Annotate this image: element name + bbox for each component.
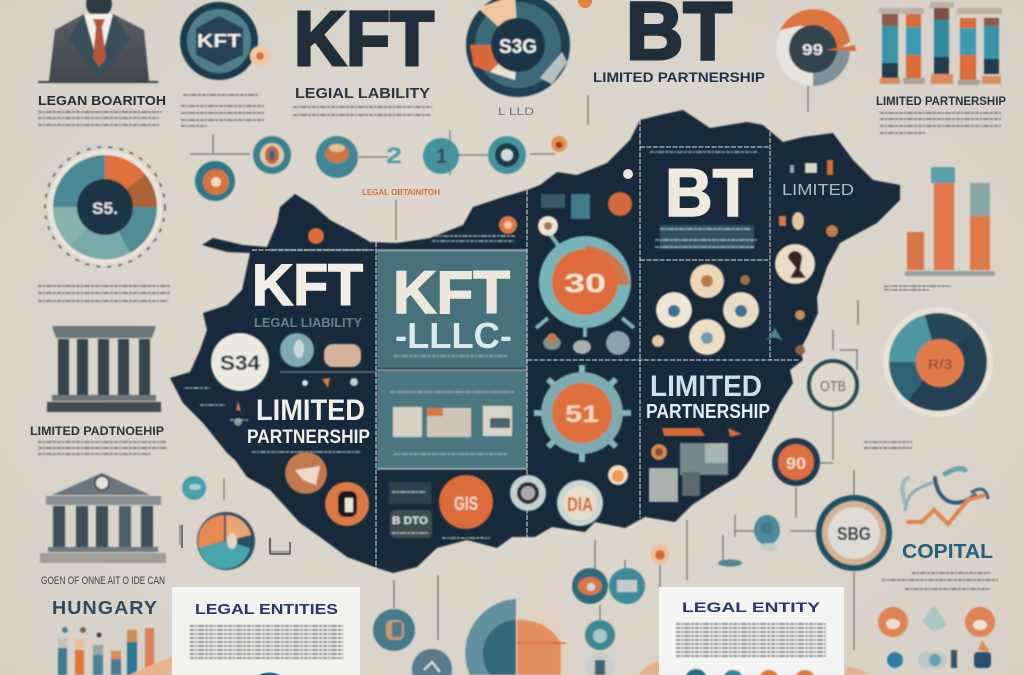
chart: lower left pie [197,512,255,570]
map fine lines [185,236,515,538]
document: legal entity right [659,587,844,675]
label: limited partnership right: LIMITED PARTNERSHIP [876,94,1006,108]
label: legal liability on map: LEGAL LIABILITY [254,315,362,330]
icons: four pale circles [656,264,759,355]
gauge: 51: 51 [565,401,599,428]
icon: KFT badge [180,2,270,80]
heading: partnership in panel: PARTNERSHIP [646,401,770,423]
icon: dark courthouse columns [47,326,161,412]
icons: orange circles lower left map [285,452,369,526]
label: legal liability: LEGIAL LABILITY [295,85,430,102]
badge: SBG ring [816,495,892,571]
hand left [128,657,172,675]
gauge: 30 [536,234,634,337]
text block: columns description [38,442,166,454]
badge: DIA [557,480,603,526]
icons below gauge 30 [543,331,630,355]
icons around pale circles [652,275,805,355]
badge: DIA: DIA [567,495,593,516]
chart: top ring gauge [466,0,570,97]
text: fine map label right [780,204,860,206]
text: teal panel fine lines [390,356,514,454]
ring icon [510,475,546,511]
icons: lower photos [649,428,742,502]
document lines left [190,626,343,658]
connector lines [180,85,858,650]
gauge: 51 [534,365,631,462]
chart: right pie: R/3 [928,356,952,372]
icon: small orange dot [578,0,592,8]
text block: dark mini panel: B DTO [392,515,428,527]
text block: KFT badge description [181,95,264,126]
label: building caption: GOEN OF ONNE AIT O IDE CAN [41,575,165,587]
badge: 90 [772,438,820,486]
circles: bottom centre icons [373,609,452,675]
chart: right bars [905,167,995,276]
document bottom dots right [685,669,815,675]
chart: right pie [883,307,993,417]
document title right: LEGAL ENTITY [682,599,821,615]
text block: donut description [38,286,170,301]
icons above gauge 30 [538,192,632,236]
icons above limited [790,160,833,175]
heading: partnership on map: PARTNERSHIP [247,427,370,448]
icons: bottom right circles [878,605,995,668]
icon: small blue dots [718,560,742,566]
chart: left donut [45,147,165,267]
panel: KFT LLC teal [377,250,527,469]
gauge: 30: 30 [564,268,606,298]
chart: Hungary bars [58,627,154,675]
icon: KFT badge: KFT [197,31,241,51]
text block: legal position description [38,112,162,125]
icon: greek bank building [40,473,166,563]
chart: gauge 99: 99 [802,42,823,59]
icon: pale orange dot [608,465,628,485]
label: Hungary: HUNGARY [52,598,158,618]
badge: 90: 90 [786,454,806,473]
badge: S34 [211,333,269,391]
badge: S34: S34 [220,352,260,375]
badge: person circle [775,244,815,284]
label: limited small on map: LIMITED [782,182,854,199]
badge: SBG ring: SBG [837,524,871,544]
document: legal entities left [172,587,360,675]
icons beside S34 [280,333,376,388]
icon: pale orange pin [651,544,669,564]
label: limited partnership: LIMITED PARTNERSHIP [593,69,765,85]
icon: coloured columns [879,2,1002,85]
map: Hungary silhouette [170,110,900,573]
chart: gauge 99 [776,9,856,86]
document title left: LEGAL ENTITIES [195,601,338,618]
heading: limited on map: LIMITED [256,394,365,427]
icon: teal blob [754,515,780,551]
icons: paired circles [572,568,645,675]
mid icons: row beneath top [195,136,567,201]
text block: legal liability description [293,107,432,115]
chart: bottom centre fan [465,599,570,675]
text block: right mid caption [864,442,912,448]
boxes in teal panel [393,406,512,437]
chart: top ring gauge: S3G [499,36,537,58]
label: legal position: LEGAN BOARITOH [38,93,166,108]
badge: OTB ring: OTB [820,378,846,395]
heading: BT on map: BT [665,155,753,231]
chart: left donut: S5. [92,199,118,218]
icon: small teal circle lower left [182,476,206,500]
text block: capital description [882,573,998,589]
badge: OTB ring [809,361,857,409]
icon: map dot white [623,169,633,179]
map small dots left [234,216,517,426]
label: orange legal obligations: LEGAL OBTAINITOH [362,188,440,197]
badge: GIS [439,475,493,529]
text block: dark mini panel [389,482,432,538]
map dividers [252,120,800,570]
label: limited partnership left: LIMITED PADTNOEHIP [30,426,164,438]
label: capital: COPITAL [902,541,993,563]
heading: KFT on map: KFT [252,253,363,318]
badge: GIS: GIS [454,494,478,515]
text block: bars caption [884,286,950,290]
heading: KFT in teal panel: KFT [393,259,510,326]
icon: businessman in suit [38,0,158,82]
label: LLC small: L LLD [498,106,534,118]
mid icons: row beneath top: 2 [386,143,402,168]
icon: abstract squiggle [902,469,988,524]
text block: right description [880,113,1002,133]
document bottom marks left [258,672,280,675]
heading: LLC: -LLLC- [395,315,512,356]
document lines right [676,624,826,656]
icons below limited [779,212,838,237]
mid icons: row beneath top: 1 [436,146,447,168]
icon: L glyph [182,525,290,554]
text block: BT description [650,152,757,249]
heading: limited in panel: LIMITED [650,370,762,403]
hand centre [639,660,868,675]
